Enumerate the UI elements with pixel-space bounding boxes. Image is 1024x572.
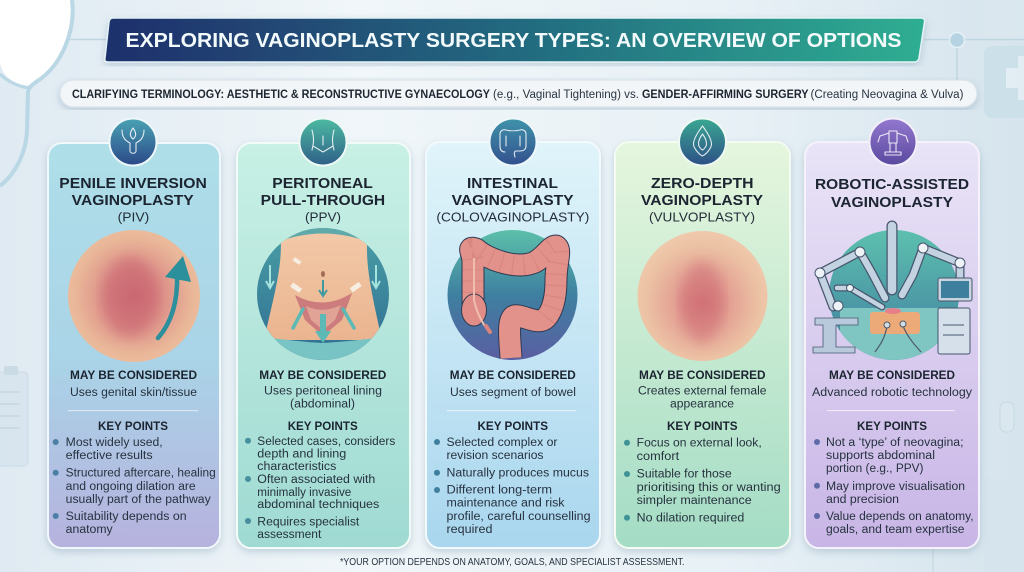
heading: zero-depth: (VULVOPLASTY) bbox=[649, 210, 755, 224]
key points: intestinal bbox=[434, 419, 590, 536]
heading: PPV: PERITONEAL bbox=[272, 176, 373, 192]
key points: PPV: Selected cases, considers bbox=[257, 436, 396, 448]
key points: robotic: May improve visualisation bbox=[826, 481, 965, 493]
key points: zero-depth bbox=[624, 419, 781, 525]
heading: zero-depth: VAGINOPLASTY bbox=[641, 193, 763, 209]
key points: PPV: minimally invasive bbox=[257, 487, 351, 499]
footnote: *YOUR OPTION DEPENDS ON ANATOMY, GOALS, AND SPECIALIST ASSESSMENT. bbox=[340, 557, 684, 568]
key points: PIV: effective results bbox=[66, 450, 153, 462]
key points: PPV: abdominal techniques bbox=[257, 499, 380, 511]
illustration: colon bbox=[448, 230, 578, 360]
icon: PIV bbox=[110, 118, 156, 166]
heading: intestinal: (COLOVAGINOPLASTY) bbox=[436, 210, 589, 224]
key points: robotic: and precision bbox=[826, 494, 899, 506]
title banner bbox=[105, 18, 925, 62]
considered block: robotic: Advanced robotic technology bbox=[812, 387, 972, 399]
key points: PIV: KEY POINTS bbox=[98, 419, 168, 433]
key points: PIV: Suitability depends on bbox=[66, 511, 187, 523]
key points: intestinal: profile, careful counselling bbox=[446, 511, 590, 523]
key points: zero-depth: Suitable for those bbox=[637, 469, 732, 481]
key points: PPV: Requires specialist bbox=[257, 516, 360, 528]
considered block: zero-depth bbox=[638, 368, 766, 410]
key points: intestinal: Selected complex or bbox=[446, 437, 558, 449]
considered block: zero-depth: MAY BE CONSIDERED bbox=[639, 368, 766, 382]
considered block: PPV: Uses peritoneal lining bbox=[264, 386, 382, 398]
heading: zero-depth bbox=[641, 176, 763, 224]
key points: robotic: goals, and team expertise bbox=[826, 524, 964, 536]
heading: PIV: VAGINOPLASTY bbox=[72, 193, 194, 209]
considered block: robotic bbox=[812, 368, 972, 399]
terminology pill bbox=[60, 80, 977, 107]
illustration: PIV tissue (abstract) bbox=[68, 230, 200, 362]
key points: zero-depth: prioritising this or wanting bbox=[637, 482, 781, 494]
key points: PIV: anatomy bbox=[66, 524, 113, 536]
key points: PIV: Most widely used, bbox=[66, 437, 163, 449]
key points: robotic bbox=[814, 419, 974, 536]
key points: zero-depth: comfort bbox=[637, 451, 680, 463]
considered block: intestinal: MAY BE CONSIDERED bbox=[450, 368, 576, 382]
considered block: robotic: MAY BE CONSIDERED bbox=[829, 368, 955, 382]
key points: PPV bbox=[245, 419, 396, 541]
title banner: EXPLORING VAGINOPLASTY SURGERY TYPES: AN OVERVIEW OF OPTIONS bbox=[126, 29, 902, 52]
key points: PPV: assessment bbox=[257, 529, 322, 541]
key points: intestinal: KEY POINTS bbox=[478, 419, 548, 433]
icon: zero-depth bbox=[679, 118, 726, 166]
terminology pill: GENDER-AFFIRMING SURGERY bbox=[642, 89, 809, 101]
terminology pill: (e.g., Vaginal Tightening) vs. bbox=[493, 89, 639, 101]
panel: intestinal vaginoplasty bbox=[426, 118, 600, 548]
considered block: PIV: MAY BE CONSIDERED bbox=[70, 368, 197, 382]
heading: PPV: PULL-THROUGH bbox=[261, 193, 385, 209]
key points: PIV: usually part of the pathway bbox=[66, 494, 211, 506]
background: medical cross box bbox=[984, 0, 1024, 118]
panel: penile inversion vaginoplasty bbox=[48, 118, 220, 548]
background: stethoscope bbox=[0, 0, 73, 186]
considered block: intestinal: Uses segment of bowel bbox=[450, 387, 576, 399]
key points: robotic: Not a ‘type’ of neovagina; bbox=[826, 437, 964, 449]
key points: intestinal: Different long-term bbox=[446, 484, 552, 496]
key points: robotic: Value depends on anatomy, bbox=[826, 511, 974, 523]
key points: intestinal: maintenance and risk bbox=[446, 498, 565, 510]
key points: zero-depth: simpler maintenance bbox=[637, 495, 752, 507]
key points: zero-depth: Focus on external look, bbox=[637, 438, 762, 450]
considered block: zero-depth: appearance bbox=[670, 398, 734, 410]
key points: intestinal: Naturally produces mucus bbox=[446, 468, 589, 480]
considered block: intestinal bbox=[450, 368, 576, 399]
considered block: PIV: Uses genital skin/tissue bbox=[70, 387, 197, 399]
heading: zero-depth: ZERO-DEPTH bbox=[651, 176, 754, 192]
panel: zero-depth vaginoplasty bbox=[615, 118, 790, 548]
illustration: surgical robot bbox=[813, 226, 972, 362]
panel: peritoneal pull-through bbox=[237, 118, 410, 548]
key points: PIV bbox=[53, 419, 216, 536]
key points: robotic: supports abdominal bbox=[826, 450, 935, 462]
key points: PIV: Structured aftercare, healing bbox=[66, 468, 216, 480]
heading: PIV bbox=[59, 176, 207, 224]
background: connector node bbox=[70, 32, 1024, 80]
heading: robotic: ROBOTIC-ASSISTED bbox=[815, 177, 969, 193]
key points: zero-depth: No dilation required bbox=[637, 513, 744, 525]
heading: PPV: (PPV) bbox=[305, 210, 341, 224]
icon: colon bbox=[490, 118, 536, 166]
illustration: external tissue (abstract) bbox=[638, 231, 768, 361]
heading: PIV: (PIV) bbox=[118, 210, 149, 224]
key points: PIV: and ongoing dilation are bbox=[66, 481, 196, 493]
considered block: PIV bbox=[70, 368, 197, 399]
heading: intestinal: INTESTINAL bbox=[467, 176, 558, 192]
considered block: zero-depth: Creates external female bbox=[638, 386, 766, 398]
key points: intestinal: revision scenarios bbox=[446, 450, 544, 462]
key points: PPV: depth and lining bbox=[257, 448, 346, 460]
considered block: PPV bbox=[259, 368, 387, 410]
background: lab equipment bbox=[933, 402, 1024, 572]
heading: robotic bbox=[815, 177, 969, 211]
heading: intestinal: VAGINOPLASTY bbox=[452, 193, 574, 209]
panel: robotic-assisted vaginoplasty bbox=[805, 118, 979, 548]
terminology pill: CLARIFYING TERMINOLOGY: AESTHETIC & RECONSTRUCTIVE GYNAECOLOGY bbox=[72, 89, 490, 101]
key points: zero-depth: KEY POINTS bbox=[667, 419, 738, 433]
illustration: abdomen with arrows bbox=[256, 226, 392, 362]
background: clipboard bbox=[0, 366, 28, 466]
icon: robotic bbox=[870, 118, 916, 166]
terminology pill: (Creating Neovagina & Vulva) bbox=[810, 89, 964, 101]
key points: intestinal: required bbox=[446, 524, 492, 536]
heading: robotic: VAGINOPLASTY bbox=[831, 195, 953, 211]
key points: robotic: portion (e.g., PPV) bbox=[826, 463, 924, 475]
key points: PPV: KEY POINTS bbox=[288, 419, 358, 433]
considered block: PPV: (abdominal) bbox=[290, 398, 355, 410]
key points: robotic: KEY POINTS bbox=[857, 419, 927, 433]
heading: PIV: PENILE INVERSION bbox=[59, 176, 207, 192]
heading: PPV bbox=[261, 176, 385, 224]
key points: PPV: Often associated with bbox=[257, 474, 375, 486]
key points: PPV: characteristics bbox=[257, 461, 337, 473]
heading: intestinal bbox=[436, 176, 589, 224]
considered block: PPV: MAY BE CONSIDERED bbox=[259, 368, 387, 382]
icon: PPV bbox=[300, 118, 346, 166]
